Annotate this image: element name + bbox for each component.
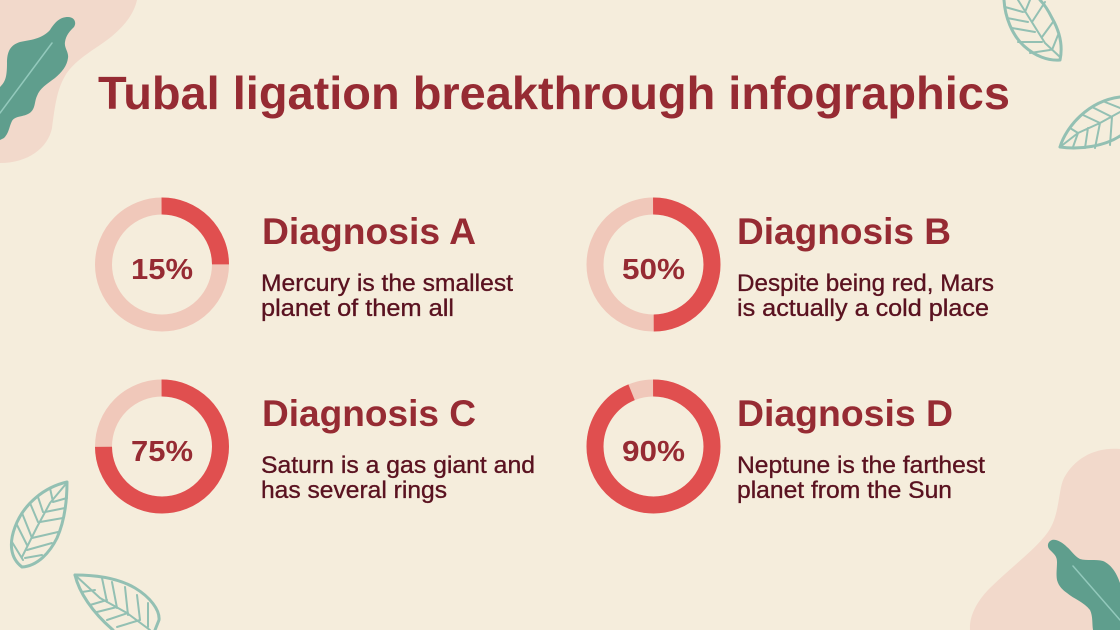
icon: solid green leaf bottom-right (1048, 540, 1120, 630)
icon: outline leaf top-right 2 (1060, 97, 1120, 148)
blob: bottom-right (970, 449, 1120, 630)
icon: outline leaf bottom-left 1 (11, 482, 67, 567)
donut chart: 50% (595, 206, 712, 323)
text: Diagnosis B description: Despite being red, Mars (737, 270, 994, 297)
title: Tubal ligation breakthrough infographics (98, 67, 1010, 119)
icon: outline leaf top-right 1 (1004, 0, 1061, 60)
blob: top-left (0, 0, 137, 163)
panel: Diagnosis B (595, 206, 994, 323)
text: Diagnosis C description: has several rings (261, 477, 447, 504)
text: Diagnosis D description: planet from the Sun (737, 477, 952, 504)
panel: Diagnosis A (104, 206, 513, 323)
text: Diagnosis A description: Mercury is the smallest (261, 270, 513, 297)
panel: Diagnosis D (595, 388, 985, 505)
heading: Diagnosis C: Diagnosis C (262, 393, 476, 434)
heading: Diagnosis D: Diagnosis D (737, 393, 953, 434)
donut chart: 90%: 90% (622, 436, 685, 468)
icon: outline leaf bottom-left 2 (75, 575, 159, 630)
donut chart: 75% (104, 388, 220, 505)
heading: Diagnosis B: Diagnosis B (737, 211, 951, 252)
panel: Diagnosis C (104, 388, 535, 505)
text: Diagnosis A description: planet of them all (261, 295, 454, 322)
donut chart: 90% (595, 388, 712, 505)
donut chart: 15%: 15% (131, 254, 193, 286)
donut chart: 50%: 50% (622, 254, 685, 286)
text: Diagnosis C description: Saturn is a gas giant and (261, 452, 535, 479)
icon: solid green leaf top-left (0, 17, 75, 140)
donut chart: 75%: 75% (131, 436, 193, 468)
text: Diagnosis B description: is actually a cold place (737, 295, 989, 322)
text: Diagnosis D description: Neptune is the farthest (737, 452, 985, 479)
donut chart: 15% (104, 206, 220, 323)
heading: Diagnosis A: Diagnosis A (262, 211, 476, 252)
